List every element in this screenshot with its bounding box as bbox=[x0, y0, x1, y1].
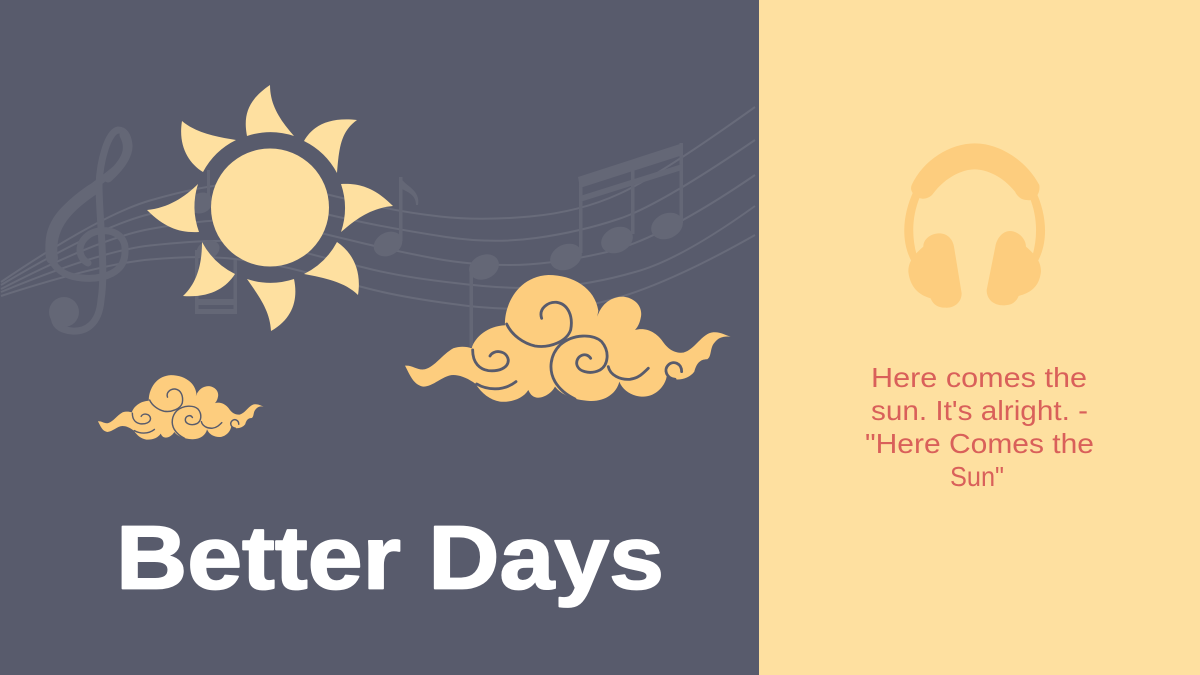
panel: lyric sidebar bbox=[759, 0, 1200, 675]
icon: small cloud bbox=[98, 375, 264, 440]
lyric quote: Sun" bbox=[950, 461, 1004, 492]
icon: eighth note bbox=[369, 177, 418, 261]
music staff with notes bbox=[1, 107, 755, 347]
icon: sun bbox=[147, 85, 393, 331]
icon: notes behind sun bbox=[186, 170, 237, 314]
icon: treble clef bbox=[49, 130, 129, 331]
lyric quote bbox=[865, 362, 1094, 492]
icon: quarter note bbox=[465, 250, 503, 347]
icon: large cloud bbox=[405, 275, 731, 402]
title: Better Days bbox=[116, 508, 664, 608]
lyric quote: Here comes the bbox=[871, 362, 1087, 393]
lyric quote: "Here Comes the bbox=[865, 428, 1094, 459]
icon: headphones bbox=[904, 143, 1045, 308]
icon: beamed notes bbox=[546, 143, 687, 275]
panel: dark background bbox=[0, 0, 759, 675]
lyric quote: sun. It's alright. - bbox=[871, 395, 1088, 426]
